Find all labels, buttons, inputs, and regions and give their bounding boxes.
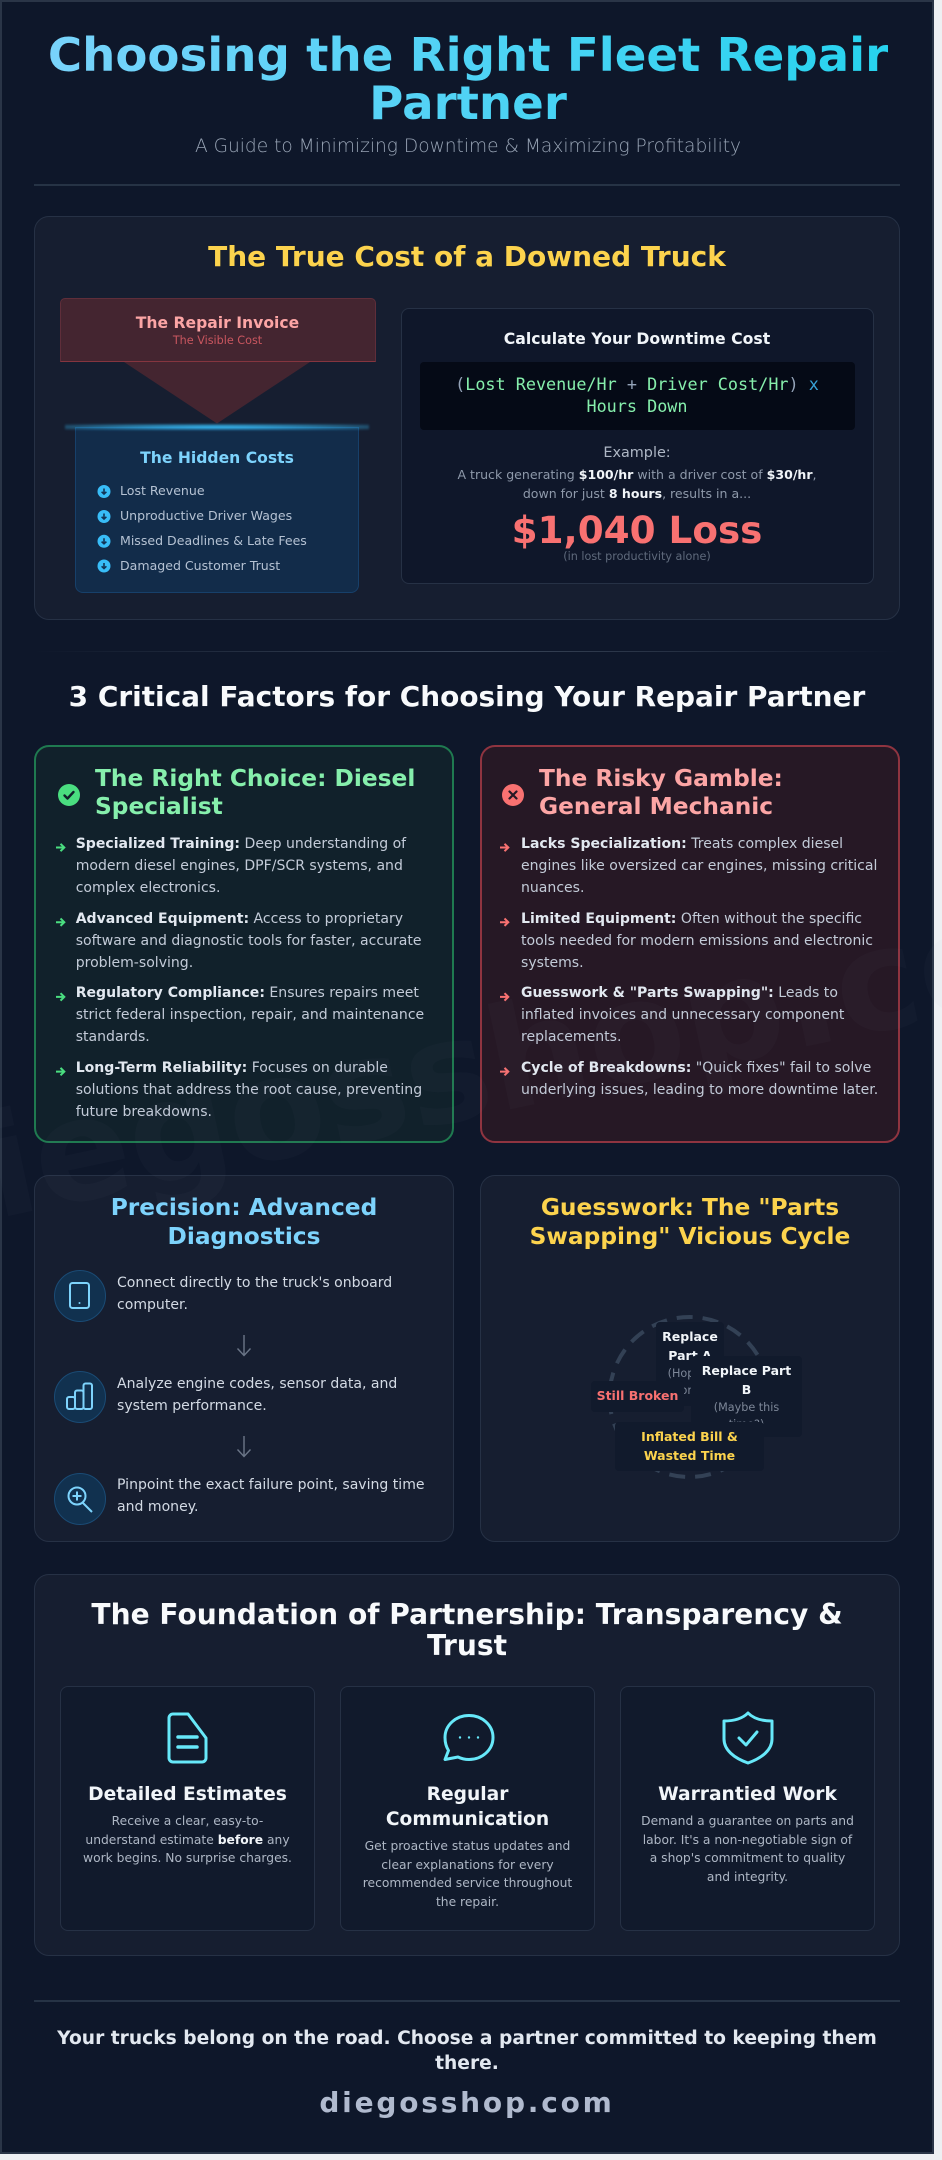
list: Lacks Specialization: Treats complex diesel <box>521 836 843 852</box>
cycle diagram <box>597 1315 791 1479</box>
loss figure: $1,040 Loss <box>512 508 762 552</box>
item arrows <box>56 843 66 1076</box>
list: Regulatory Compliance: Ensures repairs meet <box>76 985 419 1001</box>
arrow <box>237 1335 251 1356</box>
icon: shield <box>722 1711 774 1764</box>
card title: Detailed Estimates <box>88 1784 287 1805</box>
panel title: Diagnostics <box>168 1222 320 1250</box>
panel title: Specialist <box>95 792 223 820</box>
panel title <box>539 764 783 820</box>
hidden costs box: Missed Deadlines & Late Fees <box>120 532 307 548</box>
node: replace part B <box>691 1356 802 1437</box>
panel: parts swapping cycle <box>480 1175 900 1542</box>
card text: Demand a guarantee on parts and <box>641 1814 854 1828</box>
list: future breakdowns. <box>76 1104 212 1120</box>
step 2 text <box>117 1376 397 1414</box>
triangle pointer <box>124 362 310 424</box>
list: Guesswork & "Parts Swapping": Leads to <box>521 985 838 1001</box>
list: software and diagnostic tools for faster, accurate <box>76 933 422 949</box>
panel title <box>111 1194 377 1250</box>
node: still broken: Still Broken <box>597 1388 678 1403</box>
header <box>48 29 888 157</box>
title: Partner <box>369 77 567 131</box>
node: replace part B: Replace Part B <box>702 1363 791 1396</box>
card: warrantied work <box>620 1686 875 1931</box>
node: inflated bill: Inflated Bill & <box>641 1429 738 1444</box>
panel title: The Foundation of Partnership: Transparency & <box>91 1598 843 1631</box>
node: inflated bill: Wasted Time <box>644 1448 735 1462</box>
icon: document <box>168 1712 208 1764</box>
panel: true cost of a downed truck <box>34 216 900 620</box>
hidden costs box <box>75 427 359 593</box>
step 2 text: Analyze engine codes, sensor data, and <box>117 1376 397 1392</box>
list: Specialized Training: Deep understanding of <box>76 836 406 852</box>
hidden costs box: Damaged Customer Trust <box>120 558 280 572</box>
loss note: (in lost productivity alone) <box>563 550 711 563</box>
panel: advanced diagnostics <box>34 1175 454 1542</box>
step 1 text: computer. <box>117 1297 188 1313</box>
panel title: Trust <box>427 1629 507 1662</box>
list: complex electronics. <box>76 880 220 896</box>
list: underlying issues, leading to more downtime later. <box>521 1082 878 1098</box>
title <box>0 32 936 128</box>
hidden cost list <box>98 485 110 572</box>
card text <box>83 1814 292 1865</box>
panel title: Precision: Advanced <box>111 1194 377 1221</box>
dashed ring <box>609 1315 759 1479</box>
step 3 text: and money. <box>117 1499 198 1515</box>
repair invoice box <box>60 298 376 362</box>
list: Cycle of Breakdowns: "Quick fixes" fail to solve <box>521 1060 871 1076</box>
heading: true cost: The True Cost of a Downed Truck <box>208 240 726 273</box>
diagram: iceberg of costs <box>60 298 376 593</box>
list: standards. <box>76 1029 150 1045</box>
card text: clear explanations for every <box>381 1858 554 1872</box>
heading: 3 critical factors: 3 Critical Factors for Choosing Your Repair Partner <box>69 680 865 713</box>
list: inflated invoices and unnecessary component <box>521 1007 844 1023</box>
step 3 text <box>117 1477 425 1515</box>
calculator panel: A truck generating $100/hr with a driver cost of $30/hr, <box>457 466 817 482</box>
card: regular communication <box>340 1686 595 1931</box>
item arrows <box>500 843 510 1076</box>
list: tools needed for modern emissions and electronic <box>521 933 873 949</box>
panel title <box>91 1598 843 1662</box>
panel title: General Mechanic <box>539 792 773 820</box>
list: solutions that address the root cause, preventing <box>76 1082 422 1098</box>
panel: diesel specialist <box>34 745 454 1143</box>
hidden costs box: The Hidden Costs <box>140 449 294 467</box>
list: engines like oversized car engines, missing critical <box>521 858 877 874</box>
list: replacements. <box>521 1029 621 1045</box>
step 1 text <box>117 1275 392 1313</box>
list <box>56 836 424 1120</box>
list: Advanced Equipment: Access to proprietary <box>76 911 403 927</box>
card text: labor. It's a non-negotiable sign of <box>643 1833 852 1847</box>
step 2 text: system performance. <box>117 1398 267 1414</box>
calculator panel <box>400 308 874 584</box>
card title: Warrantied Work <box>658 1784 837 1805</box>
step 1 text: Connect directly to the truck's onboard <box>117 1275 392 1291</box>
footer brand: diegosshop.com <box>319 2086 615 2119</box>
list: Limited Equipment: Often without the specific <box>521 911 862 927</box>
list: strict federal inspection, repair, and maintenance <box>76 1007 424 1023</box>
hidden costs box: Unproductive Driver Wages <box>120 508 292 523</box>
card text <box>363 1839 572 1909</box>
card title <box>386 1784 549 1830</box>
list: nuances. <box>521 880 584 896</box>
node: replace part A: Replace Part A <box>662 1329 718 1362</box>
panel: foundation of partnership <box>34 1574 900 1956</box>
node: replace part B: (Maybe this time?) <box>714 1401 779 1431</box>
footer call to action: there. <box>435 2053 499 2074</box>
repair invoice box: The Visible Cost <box>173 334 262 346</box>
panel: general mechanic <box>480 745 900 1143</box>
card text: Get proactive status updates and <box>365 1839 570 1853</box>
footer call to action: Your trucks belong on the road. Choose a partner committed to keeping them <box>57 2028 877 2049</box>
title: Choosing the Right Fleet Repair <box>48 29 888 83</box>
list: Long-Term Reliability: Focuses on durable <box>76 1060 388 1076</box>
node: replace part A: (Hope it works) <box>668 1367 712 1397</box>
formula box: Hours Down <box>586 396 688 416</box>
icon: check <box>58 784 80 806</box>
formula box <box>420 362 854 430</box>
arrow <box>237 1436 251 1458</box>
calculator title: Calculate Your Downtime Cost <box>504 329 770 348</box>
hidden costs box: Lost Revenue <box>120 483 205 498</box>
list: problem-solving. <box>76 954 193 970</box>
step 2 icon: bars <box>54 1371 106 1423</box>
list: modern diesel engines, DPF/SCR systems, and <box>76 858 403 874</box>
list: systems. <box>521 954 584 970</box>
glow line <box>65 424 369 430</box>
icon: cross <box>502 784 524 806</box>
card title: Communication <box>386 1809 549 1830</box>
card: detailed estimates <box>60 1686 315 1931</box>
formula box: (Lost Revenue/Hr + Driver Cost/Hr) x <box>455 374 819 394</box>
card text: work begins. No surprise charges. <box>83 1851 292 1865</box>
repair invoice box: The Repair Invoice <box>136 314 299 332</box>
card text: a shop's commitment to quality <box>650 1851 845 1865</box>
footer call to action <box>57 2028 877 2074</box>
panel title <box>95 764 415 820</box>
node: inflated bill <box>615 1422 764 1471</box>
panel title: Swapping" Vicious Cycle <box>530 1222 850 1250</box>
card text: understand estimate before any <box>85 1833 290 1847</box>
example text: Example: <box>603 445 671 461</box>
list <box>500 836 878 1098</box>
step 3 text: Pinpoint the exact failure point, saving time <box>117 1477 425 1493</box>
node: replace part A <box>656 1322 724 1406</box>
card text <box>641 1814 854 1884</box>
subtitle: A Guide to Minimizing Downtime & Maximizing Profitability <box>195 136 741 157</box>
step 3 icon: magnifier <box>54 1473 106 1525</box>
panel title <box>530 1194 850 1250</box>
step 1 icon: tablet <box>54 1270 106 1322</box>
node: still broken <box>591 1381 684 1412</box>
calculator panel: down for just 8 hours, results in a... <box>523 486 751 500</box>
panel title: The Right Choice: Diesel <box>95 764 415 792</box>
card text: the repair. <box>436 1895 499 1909</box>
card text: recommended service throughout <box>363 1876 572 1890</box>
panel title: The Risky Gamble: <box>539 764 783 792</box>
card text: Receive a clear, easy-to- <box>112 1814 263 1828</box>
card title: Regular <box>427 1784 508 1805</box>
icon: chat <box>444 1714 494 1761</box>
panel title: Guesswork: The "Parts <box>541 1194 839 1221</box>
card text: and integrity. <box>707 1870 788 1884</box>
